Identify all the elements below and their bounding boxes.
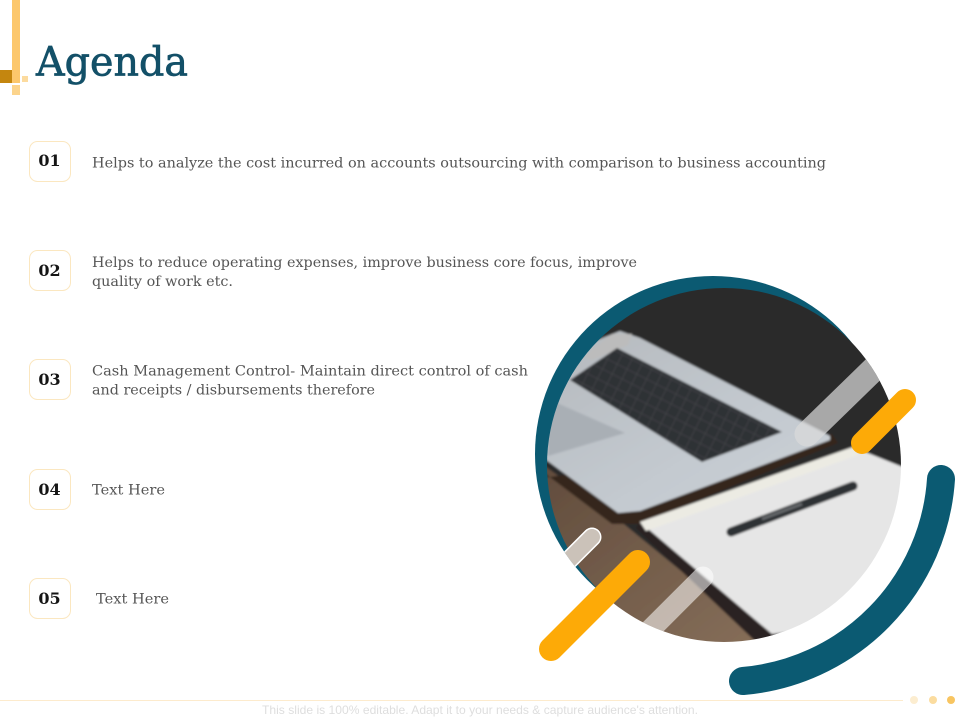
footer line — [0, 700, 903, 702]
notebook — [638, 446, 901, 640]
item 01 text: Helps to analyze the cost incurred on accounts outsourcing with comparison to business accounting — [92, 156, 826, 172]
circular laptop and notebook photo — [547, 288, 901, 642]
orange bar upper right — [862, 400, 905, 443]
number badge 03: 03 — [38, 370, 61, 389]
title: Agenda — [35, 40, 188, 86]
header accent: bars and squares — [0, 0, 28, 95]
teal arc lower right — [743, 479, 941, 681]
footer dots — [910, 696, 955, 704]
wood desk — [547, 466, 755, 642]
agenda item 03 — [30, 360, 528, 400]
laptop base — [530, 331, 838, 524]
item 03 text: and receipts / disbursements therefore — [92, 382, 375, 398]
trackpad — [548, 404, 624, 456]
orange bar lower left — [551, 562, 638, 649]
item 02 text: quality of work etc. — [92, 274, 233, 290]
item 02 text — [92, 255, 637, 290]
teal ring behind photo — [535, 276, 891, 632]
number badge 01 — [30, 142, 70, 182]
number badge 04: 04 — [38, 480, 61, 499]
pen — [731, 486, 853, 532]
agenda item 02 — [30, 250, 637, 290]
keyboard — [570, 348, 782, 462]
item 05 text: Text Here — [96, 592, 169, 608]
footer note: This slide is 100% editable. Adapt it to your needs & capture audience's attention. — [262, 703, 698, 717]
translucent outlined bar lower left — [560, 537, 592, 569]
item 04 text: Text Here — [92, 482, 165, 498]
number badge 03 — [30, 360, 70, 400]
agenda item 04 — [30, 470, 165, 510]
translucent bar bottom — [640, 577, 703, 640]
item 02 text: Helps to reduce operating expenses, improve business core focus, improve — [92, 255, 637, 271]
number badge 02 — [30, 250, 70, 290]
item 03 text — [92, 364, 528, 398]
item 03 text: Cash Management Control- Maintain direct control of cash — [92, 364, 528, 380]
number badge 02: 02 — [38, 261, 61, 280]
agenda item 05 — [30, 578, 169, 618]
agenda item 01 — [30, 142, 826, 182]
translucent bar upper right — [807, 363, 880, 434]
hinge highlight — [628, 332, 633, 336]
number badge 05: 05 — [38, 589, 61, 608]
number badge 01: 01 — [38, 151, 61, 170]
